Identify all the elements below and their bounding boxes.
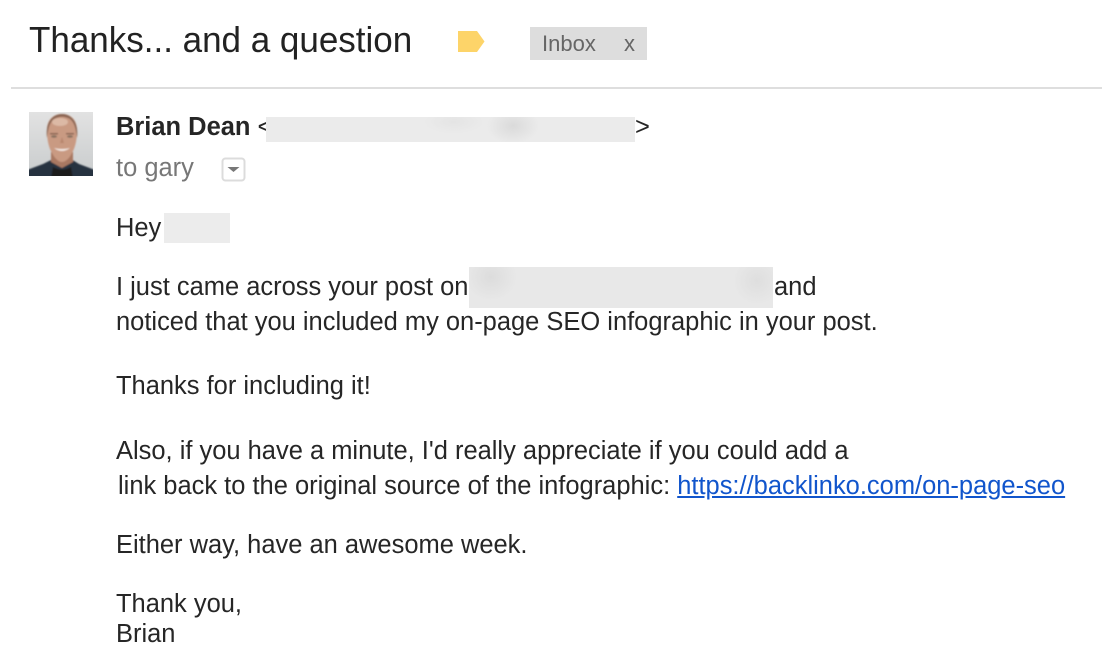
paragraph: intro word: and: [774, 273, 816, 301]
signature: [116, 590, 242, 648]
paragraph: thanks: Thanks for including it!: [116, 372, 371, 400]
sender name: Brian Dean <: [116, 113, 272, 141]
signature: Brian: [116, 620, 175, 648]
blurred recipient name: [164, 213, 230, 243]
paragraph: request line one: Also, if you have a minute, I'd really appreciate if you could add a: [116, 437, 849, 465]
header divider: [11, 87, 1102, 89]
inbox badge: x: [624, 31, 635, 56]
icon: yellow label tag: [458, 31, 484, 52]
paragraph: intro line two: noticed that you included my on-page SEO infographic in your post.: [116, 308, 878, 336]
paragraph: request line two with link: link back to the original source of the infographic: https://backlinko.com/on-page-seo: [118, 472, 1065, 500]
greeting: Hey: [116, 214, 161, 242]
icon: dropdown arrow button: [222, 158, 246, 182]
paragraph: sign-off wish: Either way, have an awesome week.: [116, 531, 527, 559]
blurred post title: [469, 267, 773, 308]
inbox badge: Inbox: [542, 31, 596, 56]
closing angle bracket: >: [635, 113, 650, 141]
blurred sender email address: [266, 117, 635, 142]
email subject heading: Thanks... and a question: [29, 19, 412, 60]
paragraph: intro line one: I just came across your post on: [116, 273, 468, 301]
signature: Thank you,: [116, 590, 242, 618]
inbox badge: [530, 27, 647, 60]
avatar: Brian Dean portrait: [29, 112, 93, 176]
recipient line: to gary: [116, 154, 194, 182]
